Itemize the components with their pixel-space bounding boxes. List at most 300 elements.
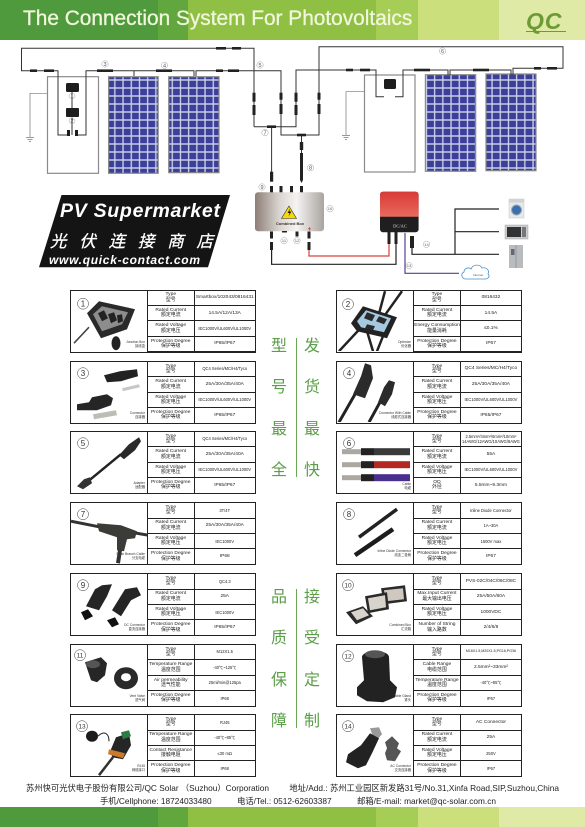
image: AC connector: 交流连接器 xyxy=(394,767,411,772)
spec table: Protection Degree xyxy=(417,551,457,556)
image: RJ45 connector: RJ45 xyxy=(137,764,145,768)
spec table: ≤0.1% xyxy=(484,326,498,331)
blue PV module 2 xyxy=(169,77,219,173)
inverter xyxy=(380,192,419,232)
spec table: Temperature Range xyxy=(149,732,192,737)
company contact line 2 xyxy=(100,796,496,806)
spec table: Rated Voltage xyxy=(155,395,186,400)
spec table: 型号 xyxy=(166,369,176,374)
spec table: 25A/50A/80A xyxy=(477,594,505,599)
number labels: 8 xyxy=(309,166,312,172)
spec table: 型号 xyxy=(432,439,442,444)
spec table: Rated Current xyxy=(155,308,186,313)
spec table: 额定电压 xyxy=(161,400,181,405)
spec table: 25A/30A/35A/40A xyxy=(472,382,510,387)
spec table xyxy=(413,715,521,776)
company contact line 2: 电话/Tel.: 0512-62603387 xyxy=(237,796,332,806)
panel: 10 combined box xyxy=(336,573,522,636)
white PV module left xyxy=(48,77,98,173)
spec table: Temperature Range xyxy=(415,678,459,683)
spec table: 3T/4T xyxy=(219,508,230,513)
spec table: IP68 xyxy=(220,554,230,559)
image: AC connector: AC Connector xyxy=(390,764,412,768)
number labels: 7 xyxy=(263,131,267,137)
spec table: 25A/30A/35A/40A xyxy=(206,382,244,387)
spec table: 保护等级 xyxy=(427,698,447,703)
spec table: Rated Voltage xyxy=(422,395,452,400)
spec table: 5.5mm~9.3mm xyxy=(475,483,507,488)
slogan: 品质保障: 障 xyxy=(271,713,287,730)
image: inline diode connector: 线连二极管 xyxy=(394,552,411,557)
spec table: 型号 xyxy=(166,722,176,727)
spec table: Type xyxy=(432,576,442,581)
image: combined boxes xyxy=(342,580,411,631)
spec table: 保护等级 xyxy=(161,485,181,490)
company contact line 2: 邮箱/E-mail: market@qc-solar.com.cn xyxy=(357,796,496,806)
image: junction box: 1 xyxy=(80,299,85,308)
PV Supermarket badge xyxy=(39,195,230,267)
spec table: Rated Current xyxy=(422,449,452,454)
panel: 9 DC connector xyxy=(70,573,256,636)
spec table: 型号 xyxy=(166,652,176,657)
image: junction box: 接线盒 xyxy=(135,343,145,348)
spec table: Type xyxy=(165,434,176,439)
spec table: IP65/IP67 xyxy=(214,483,235,488)
spec table: 保护等级 xyxy=(161,698,181,703)
panel: 6 cable xyxy=(336,431,522,494)
number labels: 6 xyxy=(441,49,444,55)
spec table: Protection Degree xyxy=(417,763,457,768)
number labels: 4 xyxy=(163,63,166,69)
spec table: Rated Current xyxy=(155,449,186,454)
spec table: 0816432 xyxy=(482,295,500,300)
image: optimizer xyxy=(338,291,411,351)
ground wires xyxy=(26,92,364,142)
spec table: 2.5mm²/4mm²/6mm²/10mm² xyxy=(465,434,516,439)
spec table xyxy=(413,574,521,635)
image: cable gland xyxy=(342,650,411,702)
image: RJ45 connector xyxy=(76,720,145,776)
spec table: IEC1000V xyxy=(215,539,234,544)
spec table: Protection Degree xyxy=(151,551,190,556)
spec table: 额定电流 xyxy=(161,313,181,318)
spec table: IP68 xyxy=(221,766,229,771)
image: inline diode connector: 8 xyxy=(346,510,351,519)
spec table: Rated Voltage xyxy=(155,607,186,612)
spec table: Protection Degree xyxy=(151,410,190,415)
spec table: Cable Range xyxy=(423,662,451,667)
number labels: 3 xyxy=(103,62,107,68)
spec table: 14.5A xyxy=(485,311,497,316)
spec table: 55A xyxy=(487,452,495,457)
image: combined boxes: 汇流箱 xyxy=(401,626,411,631)
slogan: 型号最全: 全 xyxy=(271,462,287,479)
slogan: 接受定制: 制 xyxy=(304,713,320,730)
spec table: 额定电流 xyxy=(427,455,447,460)
spec table: Rated Current xyxy=(422,308,452,313)
spec table xyxy=(147,574,255,635)
spec table: 保护等级 xyxy=(161,557,181,562)
output wires xyxy=(272,209,499,273)
spec table: 型号 xyxy=(166,439,176,444)
image: inline diode connector: Inline Diode Connector xyxy=(377,549,412,553)
spec table: Rated Voltage xyxy=(422,465,452,470)
spec table: 透气性能 xyxy=(161,683,181,688)
footer colour band xyxy=(0,807,585,827)
image: DC connector xyxy=(77,580,145,631)
image: connector with cable: 线缆式连接器 xyxy=(391,414,411,419)
image: combined boxes: 10 xyxy=(344,583,352,590)
spec table: 保护等级 xyxy=(161,415,181,420)
spec table: Energy Consumption xyxy=(414,323,460,328)
spec table: 额定电压 xyxy=(161,329,181,334)
spec table: 14.5A/12A/13A xyxy=(209,311,241,316)
spec table: Inline Diode Connector xyxy=(470,508,512,513)
number labels: 10 xyxy=(328,206,333,211)
spec table: 温度范围 xyxy=(427,683,447,688)
spec table: IP67 xyxy=(486,341,496,346)
number labels: 2 xyxy=(70,119,74,125)
company contact line 1 xyxy=(26,783,559,793)
spec table: Rated Current xyxy=(155,520,186,525)
spec table: 型号 xyxy=(432,298,442,303)
blue PV module 3 xyxy=(425,75,476,171)
slogan: 接受定制: 受 xyxy=(304,630,320,647)
spec table: PVS-02C/04C/06C/08C xyxy=(466,579,516,584)
spec table: 额定电流 xyxy=(427,313,447,318)
spec table: 额定电压 xyxy=(427,470,447,475)
spec table xyxy=(147,362,255,423)
spec table: 保护等级 xyxy=(427,769,447,774)
spec table: OD xyxy=(433,480,441,485)
spec table: 输入路数 xyxy=(427,628,447,633)
panel: 7 solar branch cable xyxy=(70,502,256,565)
image: branch cable xyxy=(71,508,147,564)
number labels: 1 xyxy=(70,94,74,100)
spec table: Type xyxy=(432,292,442,297)
spec table: Rated Current xyxy=(422,520,452,525)
spec table: 额定电流 xyxy=(427,738,447,743)
spec table xyxy=(147,291,255,352)
spec table: Protection Degree xyxy=(151,480,190,485)
spec table: Protection Degree xyxy=(151,763,190,768)
spec table: QC4.3 xyxy=(219,579,231,584)
spec table: 型号 xyxy=(166,298,176,303)
spec table: 额定电流 xyxy=(161,385,181,390)
spec table: Protection Degree xyxy=(151,693,190,698)
blue PV module 4 xyxy=(486,74,536,171)
spec table: Type xyxy=(165,292,176,297)
number labels: 12 xyxy=(295,238,300,243)
number labels: 9 xyxy=(260,185,264,191)
white PV module right xyxy=(364,75,415,172)
spec table: 保护等级 xyxy=(161,769,181,774)
combined box: Combined Box xyxy=(276,221,305,226)
spec table: Type xyxy=(432,505,442,510)
spec table: 额定电流 xyxy=(161,455,181,460)
spec table: M12X1.5 xyxy=(217,649,233,654)
spec table: IEC1000V xyxy=(215,610,234,615)
combined box: + xyxy=(308,227,312,233)
spec table: Rated Current xyxy=(155,591,186,596)
spec table: 25A/30A/35A/40A xyxy=(206,452,244,457)
image: connector xyxy=(77,368,145,420)
spec table: 保护等级 xyxy=(161,344,181,349)
spec table xyxy=(147,715,255,776)
image: combined boxes: Combined Box xyxy=(389,623,411,627)
spec table: RJ45 xyxy=(220,720,230,725)
spec table: 型号 xyxy=(432,652,442,657)
spec table: IEC1000V/UL600V/UL1000V xyxy=(198,397,251,402)
header banner xyxy=(0,0,585,40)
spec table: Rated Voltage xyxy=(422,748,452,753)
panel: 3 connector xyxy=(70,361,256,424)
image: vent valve xyxy=(74,650,145,702)
icon: microwave xyxy=(505,225,528,239)
image: adapter: 5 xyxy=(80,439,85,448)
icon: internet cloud: Internet xyxy=(473,273,483,277)
spec table: Number of String xyxy=(418,622,455,627)
spec table: IP67 xyxy=(487,696,495,701)
spec table: AC Connector xyxy=(476,720,506,725)
image: junction box xyxy=(74,298,145,350)
panel: 1 junction box xyxy=(70,290,256,353)
icon: internet cloud xyxy=(462,265,489,279)
spec table: Rated Current xyxy=(422,379,452,384)
spec table: IP65/IP67 xyxy=(480,413,501,418)
spec table: 保护等级 xyxy=(161,628,181,633)
image: branch cable: Solar Branch Cable xyxy=(116,552,145,556)
spec table: IEC1000V/UL600V/UL1000V xyxy=(198,467,251,472)
spec table xyxy=(413,503,521,564)
spec table: 额定电压 xyxy=(427,753,447,758)
image: cable gland: Cable Gland xyxy=(392,694,411,698)
spec table: Type xyxy=(165,364,176,369)
spec table: Rated Voltage xyxy=(155,323,186,328)
spec table: 型号 xyxy=(432,581,442,586)
spec table: IP65/IP67 xyxy=(214,413,235,418)
spec table: 额定电压 xyxy=(161,470,181,475)
number labels: 5 xyxy=(258,63,262,69)
image: cable gland: 紧头 xyxy=(404,697,411,702)
spec table: 额定电压 xyxy=(161,612,181,617)
panel: 2 optimizer xyxy=(336,290,522,353)
spec table: Protection Degree xyxy=(151,339,190,344)
slogan: 品质保障: 品 xyxy=(271,589,287,606)
spec table: IP67 xyxy=(486,554,496,559)
image: adapter: 适配器 xyxy=(135,484,145,489)
spec table: 温度范围 xyxy=(161,738,181,743)
spec table xyxy=(413,291,521,352)
image: connector: 连接器 xyxy=(135,414,145,419)
spec table: Type xyxy=(432,647,442,652)
image: vent valve: 透气阀 xyxy=(135,697,144,702)
spec table: 型号 xyxy=(166,581,176,586)
spec table: Type xyxy=(165,717,176,722)
slogan: 型号最全 xyxy=(271,338,287,479)
spec table: IP65/IP67 xyxy=(214,625,235,630)
spec table: 保护等级 xyxy=(427,415,447,420)
spec table: 接触电阻 xyxy=(161,753,181,758)
spec table: Temperature Range xyxy=(149,662,192,667)
spec table: 额定电压 xyxy=(427,612,447,617)
image: cables: 电缆 xyxy=(404,485,411,490)
spec table: 14AWG/12AWG/10AWG/8AWG xyxy=(462,439,520,444)
spec table: 1000VDC xyxy=(481,610,501,615)
icon: refrigerator xyxy=(509,245,523,268)
company contact line 2: 手机/Cellphone: 18724033480 xyxy=(100,796,212,806)
image: connector: 3 xyxy=(80,369,85,378)
spec table: Type xyxy=(432,434,442,439)
panel: 14 AC connector xyxy=(336,714,522,777)
slogan: 发货最快: 最 xyxy=(304,421,320,438)
PV Supermarket badge: 光伏连接商店 xyxy=(50,233,216,251)
spec table: 型号 xyxy=(432,722,442,727)
spec table: IEC1000V/UL600V/UL1000V xyxy=(465,467,517,472)
spec table: Protection Degree xyxy=(151,622,190,627)
spec table: Type xyxy=(432,364,442,369)
image: DC connector: 9 xyxy=(80,581,85,590)
blue PV module 1 xyxy=(109,77,158,173)
spec table: Max.Input Current xyxy=(417,591,457,596)
spec table: Smartbox/102043/0816431 xyxy=(196,295,254,300)
in-line connectors xyxy=(30,47,557,183)
slogan: 发货最快: 快 xyxy=(304,462,320,479)
PV Supermarket badge: PV Supermarket xyxy=(60,200,222,222)
logo: QC: QC xyxy=(526,8,562,34)
image: adapter xyxy=(77,437,145,490)
slogan: 接受定制: 接 xyxy=(304,589,320,606)
spec table: 额定电流 xyxy=(427,385,447,390)
spec table: -40℃~85℃ xyxy=(214,735,235,740)
panel: 8 inline diode xyxy=(336,502,522,565)
spec table: ≤30 mΩ xyxy=(218,751,232,756)
spec table: Rated Voltage xyxy=(422,607,452,612)
slogan: 接受定制: 定 xyxy=(304,672,320,689)
spec table: Rated Voltage xyxy=(155,536,186,541)
spec table: 型号 xyxy=(166,510,176,515)
spec table: 250V xyxy=(486,751,496,756)
spec table xyxy=(413,645,521,706)
spec table: Protection Degree xyxy=(417,693,457,698)
slogan: 发货最快: 发 xyxy=(304,338,320,355)
slogan: 发货最快: 货 xyxy=(304,379,320,396)
title: The Connection System For Photovoltaics xyxy=(23,7,412,30)
slogan: 接受定制 xyxy=(304,588,320,730)
image: optimizer: Optimize xyxy=(398,340,411,344)
DC wiring xyxy=(22,47,563,172)
spec table: IP65/IP67 xyxy=(214,341,235,346)
image: vent valve: 11 xyxy=(76,653,83,660)
company contact line 1: 地址/Add.: 苏州工业园区新发路31号/No.31,Xinfa Road,SIP,Suzhou,China xyxy=(289,783,559,793)
spec table: Type xyxy=(165,576,176,581)
spec table: M16X1.5,M20X1.5,PG16,PG36 xyxy=(466,649,516,653)
image: connector with cable xyxy=(338,363,411,422)
image: branch cable: 分支电缆 xyxy=(131,555,145,560)
spec table: 25ml/min@125pa xyxy=(209,680,241,685)
spec table: 保护等级 xyxy=(427,344,447,349)
spec table: 1500V max xyxy=(481,539,501,544)
spec table xyxy=(413,362,521,423)
spec table: 25A xyxy=(220,594,229,599)
spec table: Protection Degree xyxy=(417,410,457,415)
spec table: QC4 Series/MC/H4/Tyco xyxy=(465,366,517,371)
image: cables xyxy=(342,438,411,490)
image: AC connector xyxy=(342,720,412,772)
image: vent valve: Vent Valve xyxy=(129,694,145,698)
image: connector with cable: Connector With Cable xyxy=(378,411,411,415)
number labels: 14 xyxy=(424,242,429,247)
spec table: 型号 xyxy=(432,369,442,374)
spec table: IP67 xyxy=(487,766,495,771)
spec table: 额定电流 xyxy=(161,526,181,531)
spec table: Type xyxy=(165,647,176,652)
combined box xyxy=(255,186,324,233)
image: optimizer: 2 xyxy=(345,300,350,309)
spec table: Rated Current xyxy=(422,732,452,737)
spec table: 保护等级 xyxy=(427,557,447,562)
spec table: IEC1000V/UL600V/UL1000V xyxy=(198,326,251,331)
spec table: 额定电压 xyxy=(427,400,447,405)
spec table: Rated Voltage xyxy=(422,536,452,541)
image: cables: 6 xyxy=(346,439,351,448)
spec table: Rated Voltage xyxy=(155,465,186,470)
spec table: Type xyxy=(165,505,176,510)
panel: 13 RJ45 xyxy=(70,714,256,777)
number labels xyxy=(69,48,446,269)
company contact line 1: 苏州快可光伏电子股份有限公司/QC Solar （Suzhou）Corporation xyxy=(26,783,269,793)
spec table: 能量消耗 xyxy=(427,329,447,334)
panel: 5 adapter xyxy=(70,431,256,494)
slogan: 型号最全: 号 xyxy=(271,379,287,396)
spec table: IEC1000V/UL600V/UL1000V xyxy=(465,397,517,402)
image: connector: Connector xyxy=(129,411,145,415)
spec table: 额定电流 xyxy=(161,597,181,602)
image: cable gland: 12 xyxy=(344,654,352,661)
spec table: 2/4/6/8 xyxy=(484,625,498,630)
slogan: 品质保障: 保 xyxy=(271,672,287,689)
PV Supermarket badge: www.quick-contact.com xyxy=(49,253,200,267)
image: RJ45 connector: 13 xyxy=(78,724,85,731)
number labels: 13 xyxy=(407,263,412,268)
spec table: -40℃~125℃ xyxy=(213,665,236,670)
image: DC connector: DC Connector xyxy=(124,623,145,627)
slogan: 品质保障 xyxy=(271,589,287,730)
image: connector with cable: 4 xyxy=(346,369,351,378)
number labels: 11 xyxy=(282,238,287,243)
system wiring diagram xyxy=(21,46,564,280)
image: inline diode connector xyxy=(343,508,412,557)
spec table: QC4 Series/MC/H4/Tyco xyxy=(202,436,247,441)
spec table: Rated Current xyxy=(155,379,186,384)
slogan: 型号最全: 型 xyxy=(271,338,287,355)
spec table: 外径 xyxy=(432,485,442,490)
inverter: DC/AC xyxy=(393,224,407,228)
spec table: IP68 xyxy=(221,696,229,701)
spec table: QC4 Series/MC/H4/Tyco xyxy=(202,366,247,371)
image: adapter: Adapter xyxy=(133,481,145,485)
spec table: 2.5mm²~33mm² xyxy=(474,665,508,670)
image: junction box: Junction Box xyxy=(126,340,145,344)
panel: 12 cable gland xyxy=(336,644,522,707)
spec table xyxy=(147,503,255,564)
spec table xyxy=(413,432,521,493)
image: AC connector: 14 xyxy=(344,724,352,731)
slogan: 发货最快 xyxy=(304,337,320,479)
spec table xyxy=(147,645,255,706)
spec table xyxy=(147,432,255,493)
image: branch cable: 7 xyxy=(80,510,85,519)
